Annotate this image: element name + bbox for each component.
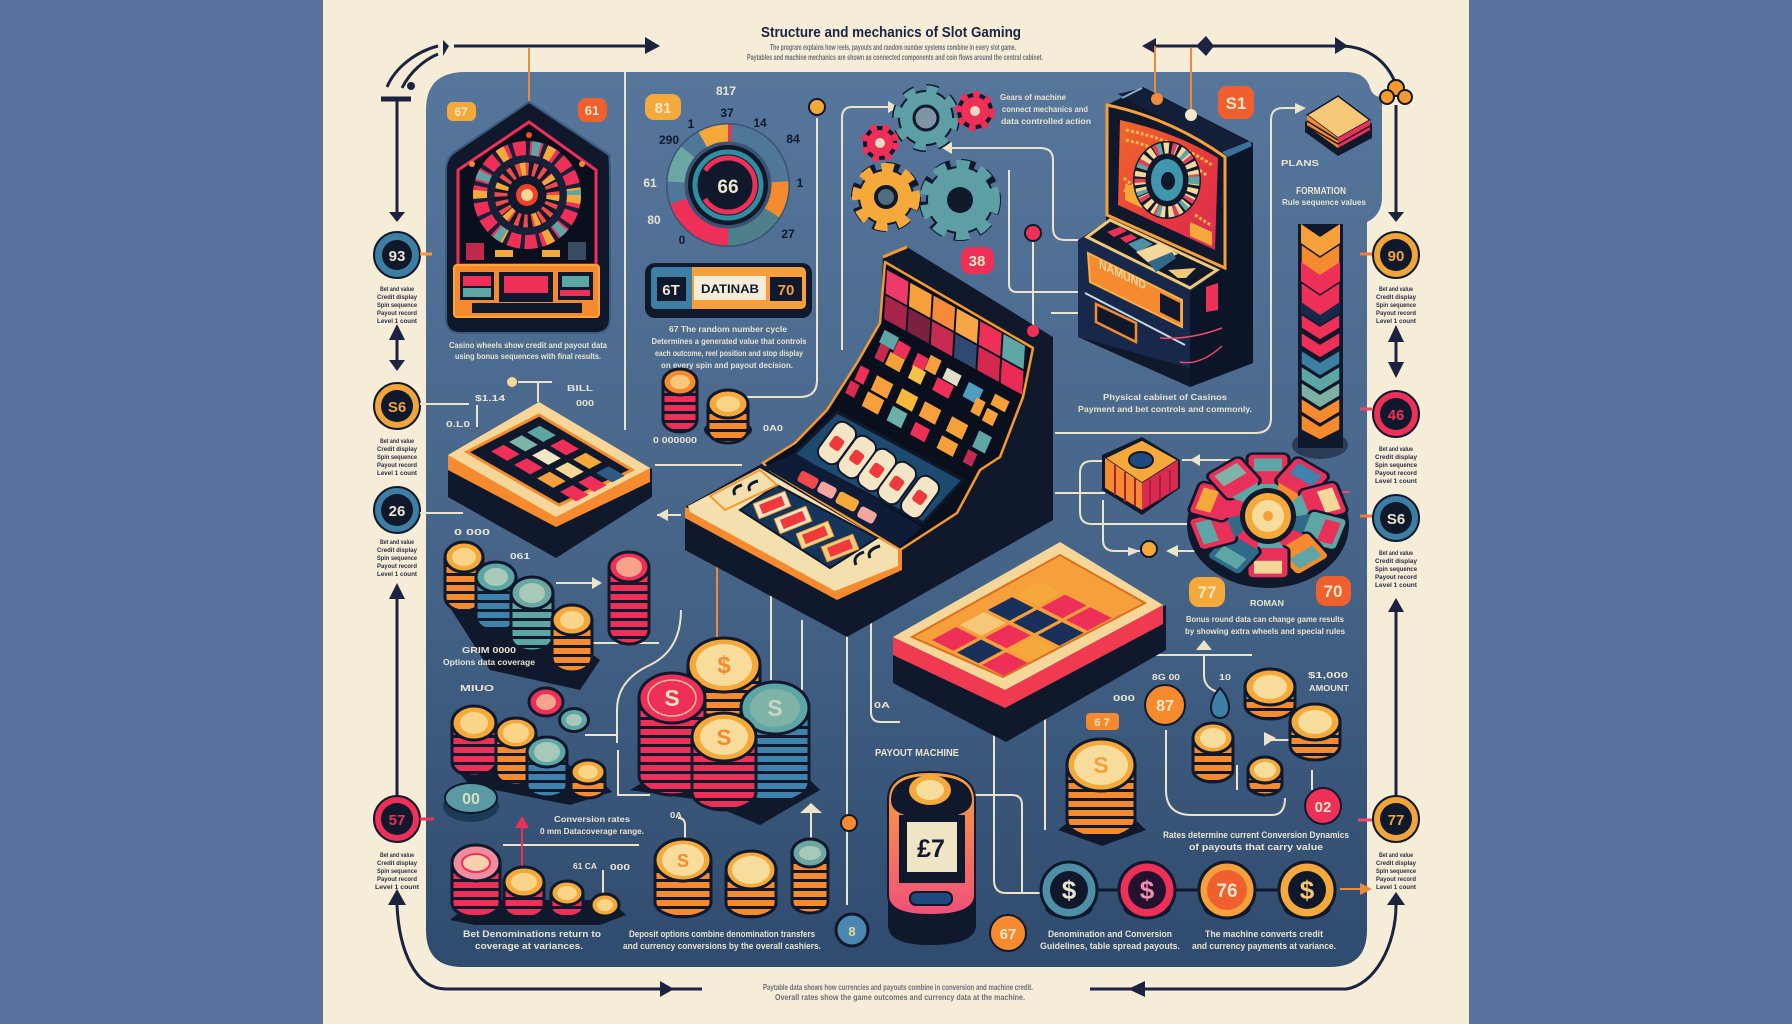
gauge scale labels: [643, 84, 804, 247]
text: tablet labels: 0 000: [454, 527, 490, 537]
gauge scale labels: 37: [720, 106, 734, 120]
label 61: [578, 98, 607, 122]
label 02 pink: [1305, 788, 1341, 824]
text: small labels: 0A: [670, 810, 682, 820]
tray tiles: [753, 491, 859, 562]
badges left: 57: [389, 812, 405, 829]
label 87: [1145, 685, 1185, 725]
gauge scale labels: 0: [679, 233, 686, 247]
chip teal: S: [767, 695, 783, 721]
chip group one: [445, 542, 600, 690]
text: cabinet caption: Payment and bet controls and commonly.: [1078, 404, 1252, 414]
gauge scale labels: 14: [753, 116, 767, 130]
text: tablet labels: [446, 383, 595, 561]
gauge scale labels: 1: [797, 176, 804, 190]
text: cabinet caption: [1078, 392, 1252, 414]
text: small labels: [573, 810, 682, 872]
badge notes left: Level 1 count: [375, 884, 420, 891]
badge notes right: [1375, 286, 1418, 891]
text: right caption: [1163, 830, 1349, 853]
badge notes right: Bet and value: [1379, 852, 1413, 859]
badge notes right: Bet and value: [1379, 550, 1413, 557]
right tablet: [893, 542, 1166, 742]
label 61: 61: [585, 103, 599, 118]
text: gears caption: connect mechanics and: [1002, 104, 1088, 114]
label 70: [1316, 576, 1351, 606]
iso cube: [1102, 437, 1180, 515]
text: coin captions: [1040, 929, 1336, 952]
badges right: 77: [1388, 812, 1404, 829]
badge notes left: Credit display: [377, 860, 417, 867]
badges left: 93: [389, 248, 405, 265]
coin blue: [1041, 862, 1097, 919]
badges right: 46: [1388, 407, 1404, 424]
badge notes left: Payout record: [377, 310, 417, 317]
upper tile grid: [884, 270, 1025, 395]
badge notes right: Payout record: [1375, 574, 1417, 581]
chip red: S: [664, 685, 680, 711]
text small label: 0 000000: [653, 435, 697, 445]
badge notes right: Level 1 count: [1376, 884, 1417, 891]
chip gold top: [688, 638, 760, 715]
console: [1078, 220, 1220, 368]
gear teal large: [925, 165, 995, 235]
text: small labels: 61 CA: [573, 861, 597, 871]
footer note: [763, 982, 1033, 1002]
text labels right stacks: $1,000: [1308, 670, 1348, 680]
badge notes left: Spin sequence: [377, 868, 417, 875]
text labels right stacks: 0A: [874, 700, 890, 710]
text: tablet labels: $1.14: [475, 393, 505, 403]
label S1: S1: [1226, 94, 1246, 113]
badge notes left: Credit display: [377, 547, 417, 554]
badges left: 26: [389, 503, 405, 520]
text: box labels: Rule sequence values: [1282, 197, 1366, 207]
coin gold: $: [1300, 875, 1315, 905]
main panel: [426, 72, 1382, 967]
gold stacks right: [1193, 669, 1340, 795]
text: row caption left: [463, 929, 601, 952]
text: tablet labels: 0.L0: [446, 419, 470, 429]
badge notes right: Spin sequence: [1375, 566, 1417, 573]
tray: [685, 507, 902, 600]
dot orange wheel: [1141, 541, 1157, 557]
coin pink: $: [1140, 875, 1155, 905]
coin orange: [1199, 862, 1255, 919]
label 67 orange: 67: [1000, 926, 1016, 943]
badges right: [1358, 232, 1419, 842]
text: chip caption one: GRIM 0000: [462, 645, 516, 655]
text: wheel caption: by showing extra wheels and special rules: [1185, 626, 1345, 636]
coin orange: 76: [1216, 881, 1238, 902]
text labels right stacks: 10: [1219, 672, 1231, 682]
text: gears caption: Gears of machine: [1000, 92, 1066, 102]
reel panel: [793, 412, 963, 523]
label 02 pink: 02: [1315, 799, 1331, 816]
label 81: 81: [655, 100, 671, 117]
badge notes left: Level 1 count: [377, 571, 418, 578]
gear yellow: [857, 168, 915, 226]
text: 0A0: [763, 423, 783, 433]
coin pink: [1119, 862, 1175, 919]
icon: club marker: [1380, 80, 1412, 104]
text: roulette caption: [449, 340, 607, 361]
number display: DATINAB: [701, 282, 759, 296]
badge notes right: Credit display: [1375, 454, 1417, 461]
badge notes left: Level 1 count: [377, 470, 418, 477]
gear pink left: [864, 127, 896, 159]
label 67 tag: 6 7: [1094, 717, 1110, 729]
chip row bottom left: [450, 845, 626, 925]
icon: tablet pin: [507, 377, 552, 387]
badge notes left: Level 1 count: [377, 318, 418, 325]
footer note: Paytable data shows how currencies and payouts combine in conversion and machine credit.: [763, 982, 1033, 992]
badge notes left: Payout record: [377, 563, 417, 570]
text: chip caption one: Options data coverage: [443, 657, 535, 667]
badge notes right: Credit display: [1376, 294, 1416, 301]
orange nameplate: [1088, 253, 1182, 327]
chevron column: [1292, 224, 1348, 459]
chip row bottom middle: S: [677, 851, 689, 871]
title: Structure and mechanics of Slot Gaming: [761, 25, 1021, 41]
chip red: [639, 673, 705, 795]
main machine pin: [1027, 325, 1039, 337]
badge notes right: Bet and value: [1379, 286, 1413, 293]
text: row caption middle: Deposit options combine denomination transfers: [629, 929, 815, 940]
label 81: [645, 94, 681, 120]
reels: [814, 418, 943, 522]
badges left: [374, 232, 469, 842]
gauge scale labels: 817: [716, 84, 736, 98]
footer note: Overall rates show the game outcomes and currency data at the machine.: [775, 992, 1025, 1002]
text labels right stacks: [874, 670, 1350, 710]
text labels right stacks: 000: [1113, 693, 1135, 703]
text labels right stacks: 8G 00: [1152, 672, 1180, 682]
subtitle: Paytables and machine mechanics are shown as connected components and coin flows around the central cabinet.: [747, 53, 1043, 62]
dots on vertical line: [836, 815, 868, 946]
icon: roulette wheel: [473, 141, 581, 249]
chip stack red: [609, 552, 649, 644]
text: tablet labels: 000: [576, 399, 595, 408]
text: display caption: Determines a generated value that controls: [652, 336, 807, 346]
coin row: [1095, 888, 1285, 892]
badge notes left: Bet and value: [380, 438, 414, 445]
gears: [857, 90, 995, 235]
text: row caption left: Bet Denominations return to: [463, 929, 601, 940]
badge notes left: Bet and value: [380, 852, 414, 859]
label 67 tag: [1086, 713, 1119, 730]
text labels right stacks: AMOUNT: [1309, 683, 1350, 693]
gear pink right: [958, 94, 992, 128]
badge notes left: Credit display: [377, 446, 417, 453]
token 00: [443, 783, 499, 822]
number display: [645, 263, 812, 318]
badge notes left: Credit display: [377, 294, 417, 301]
chip group two: [452, 688, 612, 805]
chip teal: [741, 682, 809, 802]
text: coin captions: The machine converts credit: [1205, 929, 1324, 940]
dot marker pink: [1025, 225, 1041, 241]
control panel: [454, 265, 599, 317]
coin blue: $: [1062, 875, 1077, 905]
text: row caption middle: [623, 929, 821, 952]
device battery: £7: [917, 835, 945, 863]
text: right caption: Rates determine current Conversion Dynamics: [1163, 830, 1349, 841]
icon: iso box: [1305, 96, 1372, 156]
badge notes right: Spin sequence: [1376, 868, 1416, 875]
label 87: 87: [1156, 698, 1174, 715]
outer arrows: [381, 36, 1405, 997]
chip row bottom middle: [655, 839, 828, 917]
control strip: [763, 453, 922, 547]
badge notes left: Spin sequence: [377, 302, 417, 309]
number display: 6T: [662, 282, 680, 299]
dots on vertical line: 8: [848, 924, 856, 939]
chip gold center: [692, 713, 756, 810]
chip gold top: $: [717, 652, 731, 679]
subtitle: [747, 43, 1043, 62]
badge notes left: Payout record: [377, 462, 417, 469]
label 77: 77: [1198, 583, 1216, 602]
text: chip caption one: [443, 645, 535, 667]
scattered tiles: [845, 330, 1010, 467]
label 70: 70: [1324, 582, 1342, 601]
badge notes right: Bet and value: [1379, 446, 1413, 453]
badge notes left: Spin sequence: [377, 555, 417, 562]
chip cluster large: [630, 638, 820, 825]
text: wheel caption: ROMAN: [1250, 598, 1284, 608]
donut gauge: [666, 123, 790, 247]
text: token caption: [540, 814, 644, 836]
badge notes right: Level 1 count: [1375, 582, 1418, 589]
right cabinet: NAMUND: [1099, 256, 1146, 293]
badge notes right: Payout record: [1376, 310, 1416, 317]
label S1: [1218, 86, 1254, 119]
label 38: [961, 247, 994, 274]
device battery: [888, 772, 976, 945]
text: token caption: Conversion rates: [554, 814, 630, 824]
badge notes right: Credit display: [1375, 558, 1417, 565]
main slot machine: [685, 247, 1053, 637]
cabinet pins: [1151, 93, 1197, 121]
text: small labels: 000: [610, 862, 630, 872]
badge notes right: Payout record: [1376, 876, 1416, 883]
label 67: [447, 102, 476, 121]
badge notes right: Credit display: [1376, 860, 1416, 867]
gauge scale labels: 61: [643, 176, 657, 190]
screen: [1118, 120, 1218, 250]
text: coin captions: and currency payments at variance.: [1192, 941, 1336, 952]
coin gold: [1279, 862, 1335, 919]
flower wheel: [1187, 454, 1349, 588]
text: wheel caption: [1185, 598, 1345, 636]
gauge scale labels: 80: [647, 213, 661, 227]
text: wheel caption: Bonus round data can change game results: [1186, 614, 1344, 624]
badge notes left: Bet and value: [380, 539, 414, 546]
badge notes right: Spin sequence: [1376, 302, 1416, 309]
text: box labels: PLANS: [1281, 158, 1319, 168]
text: box labels: FORMATION: [1296, 186, 1346, 197]
dot marker orange: [809, 99, 825, 115]
text: box labels: [1281, 158, 1366, 207]
gauge scale labels: 84: [786, 132, 800, 146]
text: roulette caption: Casino wheels show credit and payout data: [449, 340, 607, 350]
badge notes left: Spin sequence: [377, 454, 417, 461]
chip gold center: S: [717, 725, 731, 750]
badge notes right: Level 1 count: [1376, 318, 1417, 325]
right cabinet: [1078, 87, 1253, 387]
subtitle: The program explains how reels, payouts and random number systems combine in every slot game.: [770, 43, 1016, 52]
text: display caption: [652, 324, 807, 370]
label 77: [1189, 577, 1225, 607]
donut gauge: 66: [717, 177, 739, 198]
number display: 70: [778, 282, 794, 299]
text: gears caption: data controlled action: [1001, 116, 1091, 126]
connector lines: [420, 46, 1372, 905]
text: tablet labels: 061: [510, 551, 530, 561]
text: cabinet caption: Physical cabinet of Casinos: [1103, 392, 1227, 402]
badge notes right: Payout record: [1375, 470, 1417, 477]
badges left: S6: [388, 399, 406, 416]
big coin stack: S: [1093, 752, 1109, 778]
label 38: 38: [969, 253, 985, 270]
tray buttons: [710, 470, 880, 565]
paper sheet: [323, 0, 1469, 1024]
badge notes left: Payout record: [377, 876, 417, 883]
gauge scale labels: 27: [781, 227, 795, 241]
gauge scale labels: 290: [659, 133, 679, 147]
gauge scale labels: 1: [688, 117, 695, 131]
text: right caption: of payouts that carry value: [1189, 842, 1323, 853]
left tablet: [448, 402, 652, 558]
label 67 orange: [990, 915, 1026, 951]
text: gears caption: [1000, 92, 1091, 126]
text: token caption: 0 mm Datacoverage range.: [540, 826, 644, 836]
text: coin captions: Denomination and Conversion: [1048, 929, 1172, 940]
badge notes left: Bet and value: [380, 286, 414, 293]
badge notes right: Level 1 count: [1375, 478, 1418, 485]
token 00: 00: [462, 791, 480, 808]
label payout device: PAYOUT MACHINE: [875, 748, 959, 759]
text: roulette caption: using bonus sequences with final results.: [455, 351, 601, 361]
text: row caption left: coverage at variances.: [475, 941, 583, 952]
badge notes left: [375, 286, 420, 891]
badges right: 90: [1388, 248, 1404, 265]
text: tablet labels: BILL: [567, 383, 593, 393]
text: display caption: 67 The random number cycle: [669, 324, 787, 334]
badge notes right: Spin sequence: [1375, 462, 1417, 469]
text: display caption: each outcome, reel position and stop display: [655, 348, 803, 358]
coin stacks near display: [663, 369, 752, 443]
badges right: S6: [1387, 511, 1405, 528]
label 67: 67: [454, 105, 468, 119]
cabinet: roulette machine: [446, 102, 610, 333]
text: row caption middle: and currency conversions by the overall cashiers.: [623, 941, 821, 952]
big coin stack: [1058, 739, 1146, 846]
machine face: [763, 262, 1033, 550]
teal pin: [1211, 688, 1229, 718]
panel divider: [624, 72, 626, 430]
text: display caption: on every spin and payout decision.: [661, 360, 793, 370]
text label: MIUO: [460, 683, 495, 693]
gear teal top: [898, 90, 954, 146]
text: coin captions: Guidelines, table spread payouts.: [1040, 941, 1180, 952]
